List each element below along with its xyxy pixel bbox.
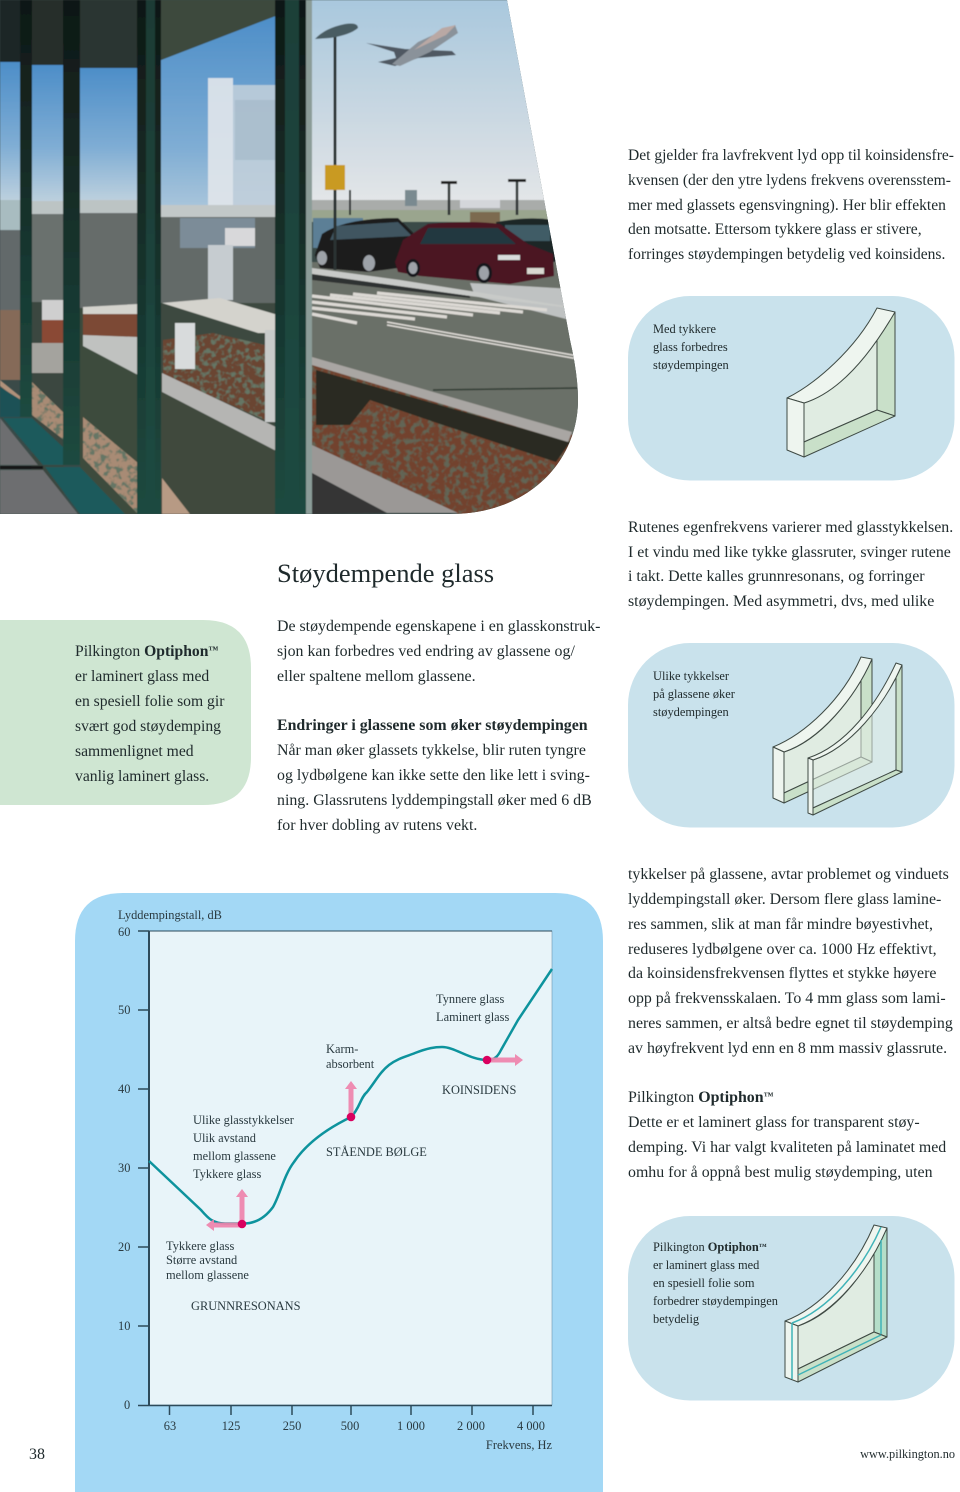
panel: Optiphon callout: en spesiell folie som gir xyxy=(75,693,225,710)
panel text: Ulike tykkelser xyxy=(653,669,730,683)
text block: introduction: sjon kan forbedres ved endring av glassene og/ xyxy=(277,643,575,660)
panel text: Med tykkere xyxy=(653,322,716,336)
text block: laminated glass explanation xyxy=(628,866,953,1057)
text block: coincidence paragraph xyxy=(628,147,954,263)
text block: resonance paragraph: i takt. Dette kalles grunnresonans, og forringer xyxy=(628,568,925,585)
panel text: forbedrer støydempingen xyxy=(653,1294,778,1308)
sky and horizon, right of the window frame xyxy=(311,0,544,201)
x axis labels: Frekvens, Hz xyxy=(486,1438,552,1452)
road surface xyxy=(312,262,592,442)
text block: coincidence paragraph: mer med glassets egensvingning). Her blir effekten xyxy=(628,197,946,214)
annotation: glass thickness: Ulike glasstykkelser xyxy=(193,1113,295,1127)
y axis labels: 40 xyxy=(118,1082,130,1096)
text block: resonance paragraph: I et vindu med like tykke glassruter, svinger rutene xyxy=(628,544,951,561)
panel text: på glassene øker xyxy=(653,687,736,701)
pane 80-138 xyxy=(80,308,136,514)
annotation: coincidence xyxy=(436,992,516,1097)
annotation: fundamental resonance: GRUNNRESONANS xyxy=(191,1299,301,1313)
text block: laminated glass explanation: av høyfrekvent lyd enn en 8 mm massiv glassrute. xyxy=(628,1040,947,1057)
curbs xyxy=(312,357,572,442)
text block: introduction: eller spaltene mellom glassene. xyxy=(277,668,476,685)
panel: Optiphon glass xyxy=(628,1216,954,1400)
panel text: betydelig xyxy=(653,1312,699,1326)
annotation: coincidence: KOINSIDENS xyxy=(442,1083,516,1097)
text block: Pilkington Optiphon: Dette er et laminert glass for transparent støy- xyxy=(628,1114,920,1131)
website: www.pilkington.no xyxy=(860,1447,955,1461)
text block: laminated glass explanation: lyddempingstall øker. Dersom flere glass lamine- xyxy=(628,891,941,908)
y axis labels: 10 xyxy=(118,1319,130,1333)
text block: Pilkington Optiphon: Pilkington Optiphon xyxy=(628,1089,764,1106)
x axis labels: 63 xyxy=(164,1419,176,1433)
text block: laminated glass explanation: da koinsidensfrekvensen flyttes et stykke høyere xyxy=(628,965,936,982)
x axis labels: 500 xyxy=(341,1419,359,1433)
y axis labels: Lyddempingstall, dB xyxy=(118,908,222,922)
text block: coincidence paragraph: forringes støydempingen betydelig ved koinsidens. xyxy=(628,246,945,263)
text block: laminated glass explanation: reduseres lydbølgene over ca. 1000 Hz effektivt, xyxy=(628,941,937,958)
crosswalk stripes xyxy=(312,293,547,323)
text block: Pilkington Optiphon: ™ xyxy=(764,1091,774,1102)
x axis labels xyxy=(164,1419,552,1452)
plane xyxy=(366,25,458,66)
text block: changes in the glass: Når man øker glassets tykkelse, blir ruten tyngre xyxy=(277,742,586,759)
marker dots xyxy=(238,1056,491,1228)
annotation: fundamental resonance xyxy=(166,1239,301,1313)
text block: Pilkington Optiphon: demping. Vi har valgt kvaliteten på laminatet med xyxy=(628,1139,946,1156)
x axis labels: 1 000 xyxy=(397,1419,425,1433)
floor and frame base xyxy=(0,387,21,417)
panel text: støydempingen xyxy=(653,705,729,719)
icon: two glass panes xyxy=(773,657,902,815)
panel text: ™ xyxy=(759,1242,767,1251)
annotation: standing wave xyxy=(326,1042,427,1159)
annotation: standing wave: absorbent xyxy=(326,1057,375,1071)
panel: Optiphon callout: er laminert glass med xyxy=(75,668,209,685)
annotation: coincidence: Laminert glass xyxy=(436,1010,509,1024)
y axis labels: 60 xyxy=(118,925,130,939)
annotation: glass thickness: Ulik avstand xyxy=(193,1131,257,1145)
text block: laminated glass explanation: opp på frekvensskalaen. To 4 mm glass som lami- xyxy=(628,990,946,1007)
sidewalk xyxy=(311,268,538,303)
window frame mullions xyxy=(20,0,32,417)
text block: changes in the glass: ning. Glassrutens lyddempingstall øker med 6 dB xyxy=(277,792,592,809)
panel: Optiphon callout: ™ xyxy=(208,645,218,656)
photo: airport terminal window with plane and cars xyxy=(0,0,600,520)
panel text: støydempingen xyxy=(653,358,729,372)
page number: 38 xyxy=(29,1446,45,1463)
text block: Pilkington Optiphon: omhu for å oppnå best mulig støydemping, uten xyxy=(628,1164,933,1181)
y axis labels: 20 xyxy=(118,1240,130,1254)
text block: resonance paragraph xyxy=(628,519,953,610)
curve: sound reduction index xyxy=(149,969,552,1224)
panel: different thicknesses xyxy=(628,643,954,828)
text block: laminated glass explanation: tykkelser på glassene, avtar problemet og vinduets xyxy=(628,866,949,883)
annotation: fundamental resonance: Større avstand xyxy=(166,1253,238,1267)
pane 32-63 xyxy=(32,302,63,493)
y axis labels: 0 xyxy=(124,1398,130,1412)
arrows: tuning directions xyxy=(206,1054,523,1231)
text block: introduction: De støydempende egenskapene i en glasskonstruk- xyxy=(277,618,600,635)
text block: coincidence paragraph: kvensen (der den ytre lydens frekvens overensstem- xyxy=(628,172,951,189)
panel: sound reduction chart xyxy=(75,893,603,1492)
text block: introduction xyxy=(277,618,600,685)
text block: laminated glass explanation: neres sammen, er altså bedre egnet til støydemping xyxy=(628,1015,953,1032)
text block: coincidence paragraph: den motsatte. Ettersom tykkere glass er stivere, xyxy=(628,221,922,238)
text block: changes in the glass: Endringer i glassene som øker støydempingen xyxy=(277,717,588,734)
annotation: coincidence: Tynnere glass xyxy=(436,992,504,1006)
panel text xyxy=(653,322,729,372)
parked cars xyxy=(496,218,556,262)
panel text: er laminert glass med xyxy=(653,1258,760,1272)
annotation: standing wave: STÅENDE BØLGE xyxy=(326,1145,427,1159)
panel text: glass forbedres xyxy=(653,340,728,354)
planter xyxy=(312,360,590,514)
text block: resonance paragraph: støydempingen. Med asymmetri, dvs, med ulike xyxy=(628,593,934,610)
panel: Optiphon callout: svært god støydemping xyxy=(75,718,221,735)
y axis labels xyxy=(118,908,222,1412)
icon: laminated glass pane xyxy=(785,1225,887,1382)
x axis labels: 250 xyxy=(283,1419,301,1433)
x axis labels: 125 xyxy=(222,1419,240,1433)
pane 161-278 xyxy=(162,304,275,514)
y axis labels: 30 xyxy=(118,1161,130,1175)
chart plot area xyxy=(149,931,552,1405)
x axis labels: 4 000 xyxy=(517,1419,545,1433)
lamp posts and sign xyxy=(335,30,517,270)
text block: changes in the glass xyxy=(277,717,592,834)
annotation: fundamental resonance: mellom glassene xyxy=(166,1268,249,1282)
text block: laminated glass explanation: res sammen, slik at man får mindre bøyestivhet, xyxy=(628,916,933,933)
panel: Optiphon callout: sammenlignet med xyxy=(75,743,194,760)
text block: resonance paragraph: Rutenes egenfrekvens varierer med glasstykkelsen. xyxy=(628,519,953,536)
y axis labels: 50 xyxy=(118,1003,130,1017)
panel: Optiphon callout: vanlig laminert glass. xyxy=(75,768,209,785)
text block: changes in the glass: og lydbølgene kan ikke sette den like lett i sving- xyxy=(277,767,590,784)
heading: Støydempende glass xyxy=(277,558,494,588)
annotation: glass thickness xyxy=(193,1113,295,1181)
panel: Optiphon callout xyxy=(0,620,251,805)
panel text xyxy=(653,669,736,719)
icon: thick glass pane xyxy=(787,308,895,457)
panel text xyxy=(653,1240,778,1326)
annotation: glass thickness: Tykkere glass xyxy=(193,1167,261,1181)
x axis labels: 2 000 xyxy=(457,1419,485,1433)
panel text: Pilkington Optiphon xyxy=(653,1240,759,1254)
text block: coincidence paragraph: Det gjelder fra lavfrekvent lyd opp til koinsidensfre- xyxy=(628,147,954,164)
panel: thicker glass xyxy=(628,296,954,480)
annotation: glass thickness: mellom glassene xyxy=(193,1149,276,1163)
text block: Pilkington Optiphon xyxy=(628,1089,946,1181)
annotation: fundamental resonance: Tykkere glass xyxy=(166,1239,234,1253)
panel text: en spesiell folie som xyxy=(653,1276,755,1290)
chart axes and ticks xyxy=(138,931,552,1415)
panel: Optiphon callout: Pilkington Optiphon xyxy=(75,643,208,660)
pane 0-20 xyxy=(0,0,21,62)
annotation: standing wave: Karm- xyxy=(326,1042,358,1056)
text block: changes in the glass: for hver dobling av rutens vekt. xyxy=(277,817,477,834)
